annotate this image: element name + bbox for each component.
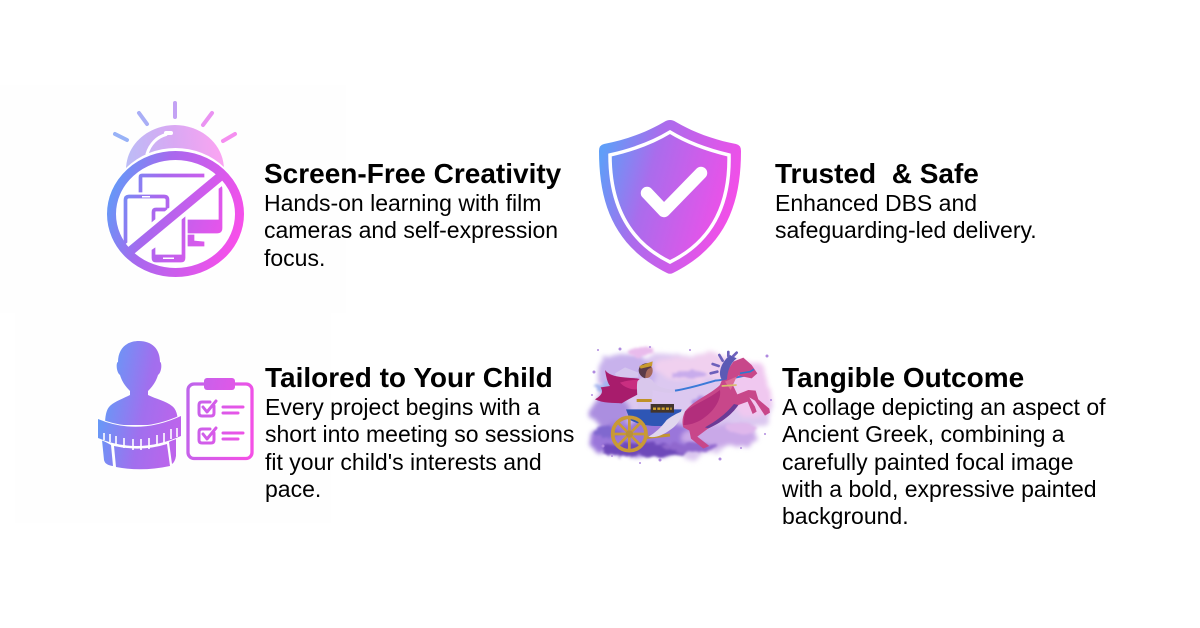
description: Ancient Greek, combining a [782,421,1065,447]
text block: Screen-Free Creativity [264,158,561,270]
measuring tape [98,416,181,446]
mane [720,355,737,381]
heading: Trusted & Safe [775,158,979,189]
temple [615,367,638,377]
description [782,394,1106,529]
devices [124,174,222,262]
wheel [613,417,646,451]
illustration: painted chariot and horse [588,346,772,464]
description: A collage depicting an aspect of [782,394,1106,420]
rays [115,103,235,141]
reins [675,373,755,391]
heading: Screen-Free Creativity [264,158,561,189]
description [265,394,574,502]
prohibition slash gap [128,175,222,253]
description: carefully painted focal image [782,448,1074,474]
light bulb dome [126,125,224,170]
icon: shield with check [599,120,741,274]
icon: measured child and checklist [98,341,252,469]
description: focus. [264,244,325,270]
horse [682,358,770,449]
description: cameras and self-expression [264,217,558,243]
painted background wash [588,353,770,457]
chariot body [626,409,682,426]
paint specks [591,346,772,464]
paint strokes [594,348,756,457]
text block: Tailored to Your Child [265,362,574,502]
phone [152,208,185,262]
ring backing [106,148,244,280]
description: Every project begins with a [265,394,540,420]
child silhouette [105,341,178,425]
heading: Tangible Outcome [782,362,1024,393]
description: safeguarding-led delivery. [775,217,1037,243]
prohibition ring [112,156,240,272]
description: Hands-on learning with film [264,190,541,216]
description: background. [782,503,909,529]
figures [595,352,770,451]
description [264,190,558,270]
rider [637,378,677,411]
tail [648,411,685,437]
tablet [124,195,169,248]
description: fit your child's interests and [265,448,542,474]
monitor [139,174,222,233]
description: pace. [265,476,321,502]
icon: no screens [106,103,244,280]
description: short into meeting so sessions [265,421,574,447]
clipboard [188,384,252,458]
description: with a bold, expressive painted [782,476,1097,502]
heading: Tailored to Your Child [265,362,553,393]
text block: Tangible Outcome [782,362,1106,529]
text block: Trusted & Safe [775,158,1037,243]
cape [595,370,653,403]
description [775,190,1037,243]
description: Enhanced DBS and [775,190,977,216]
